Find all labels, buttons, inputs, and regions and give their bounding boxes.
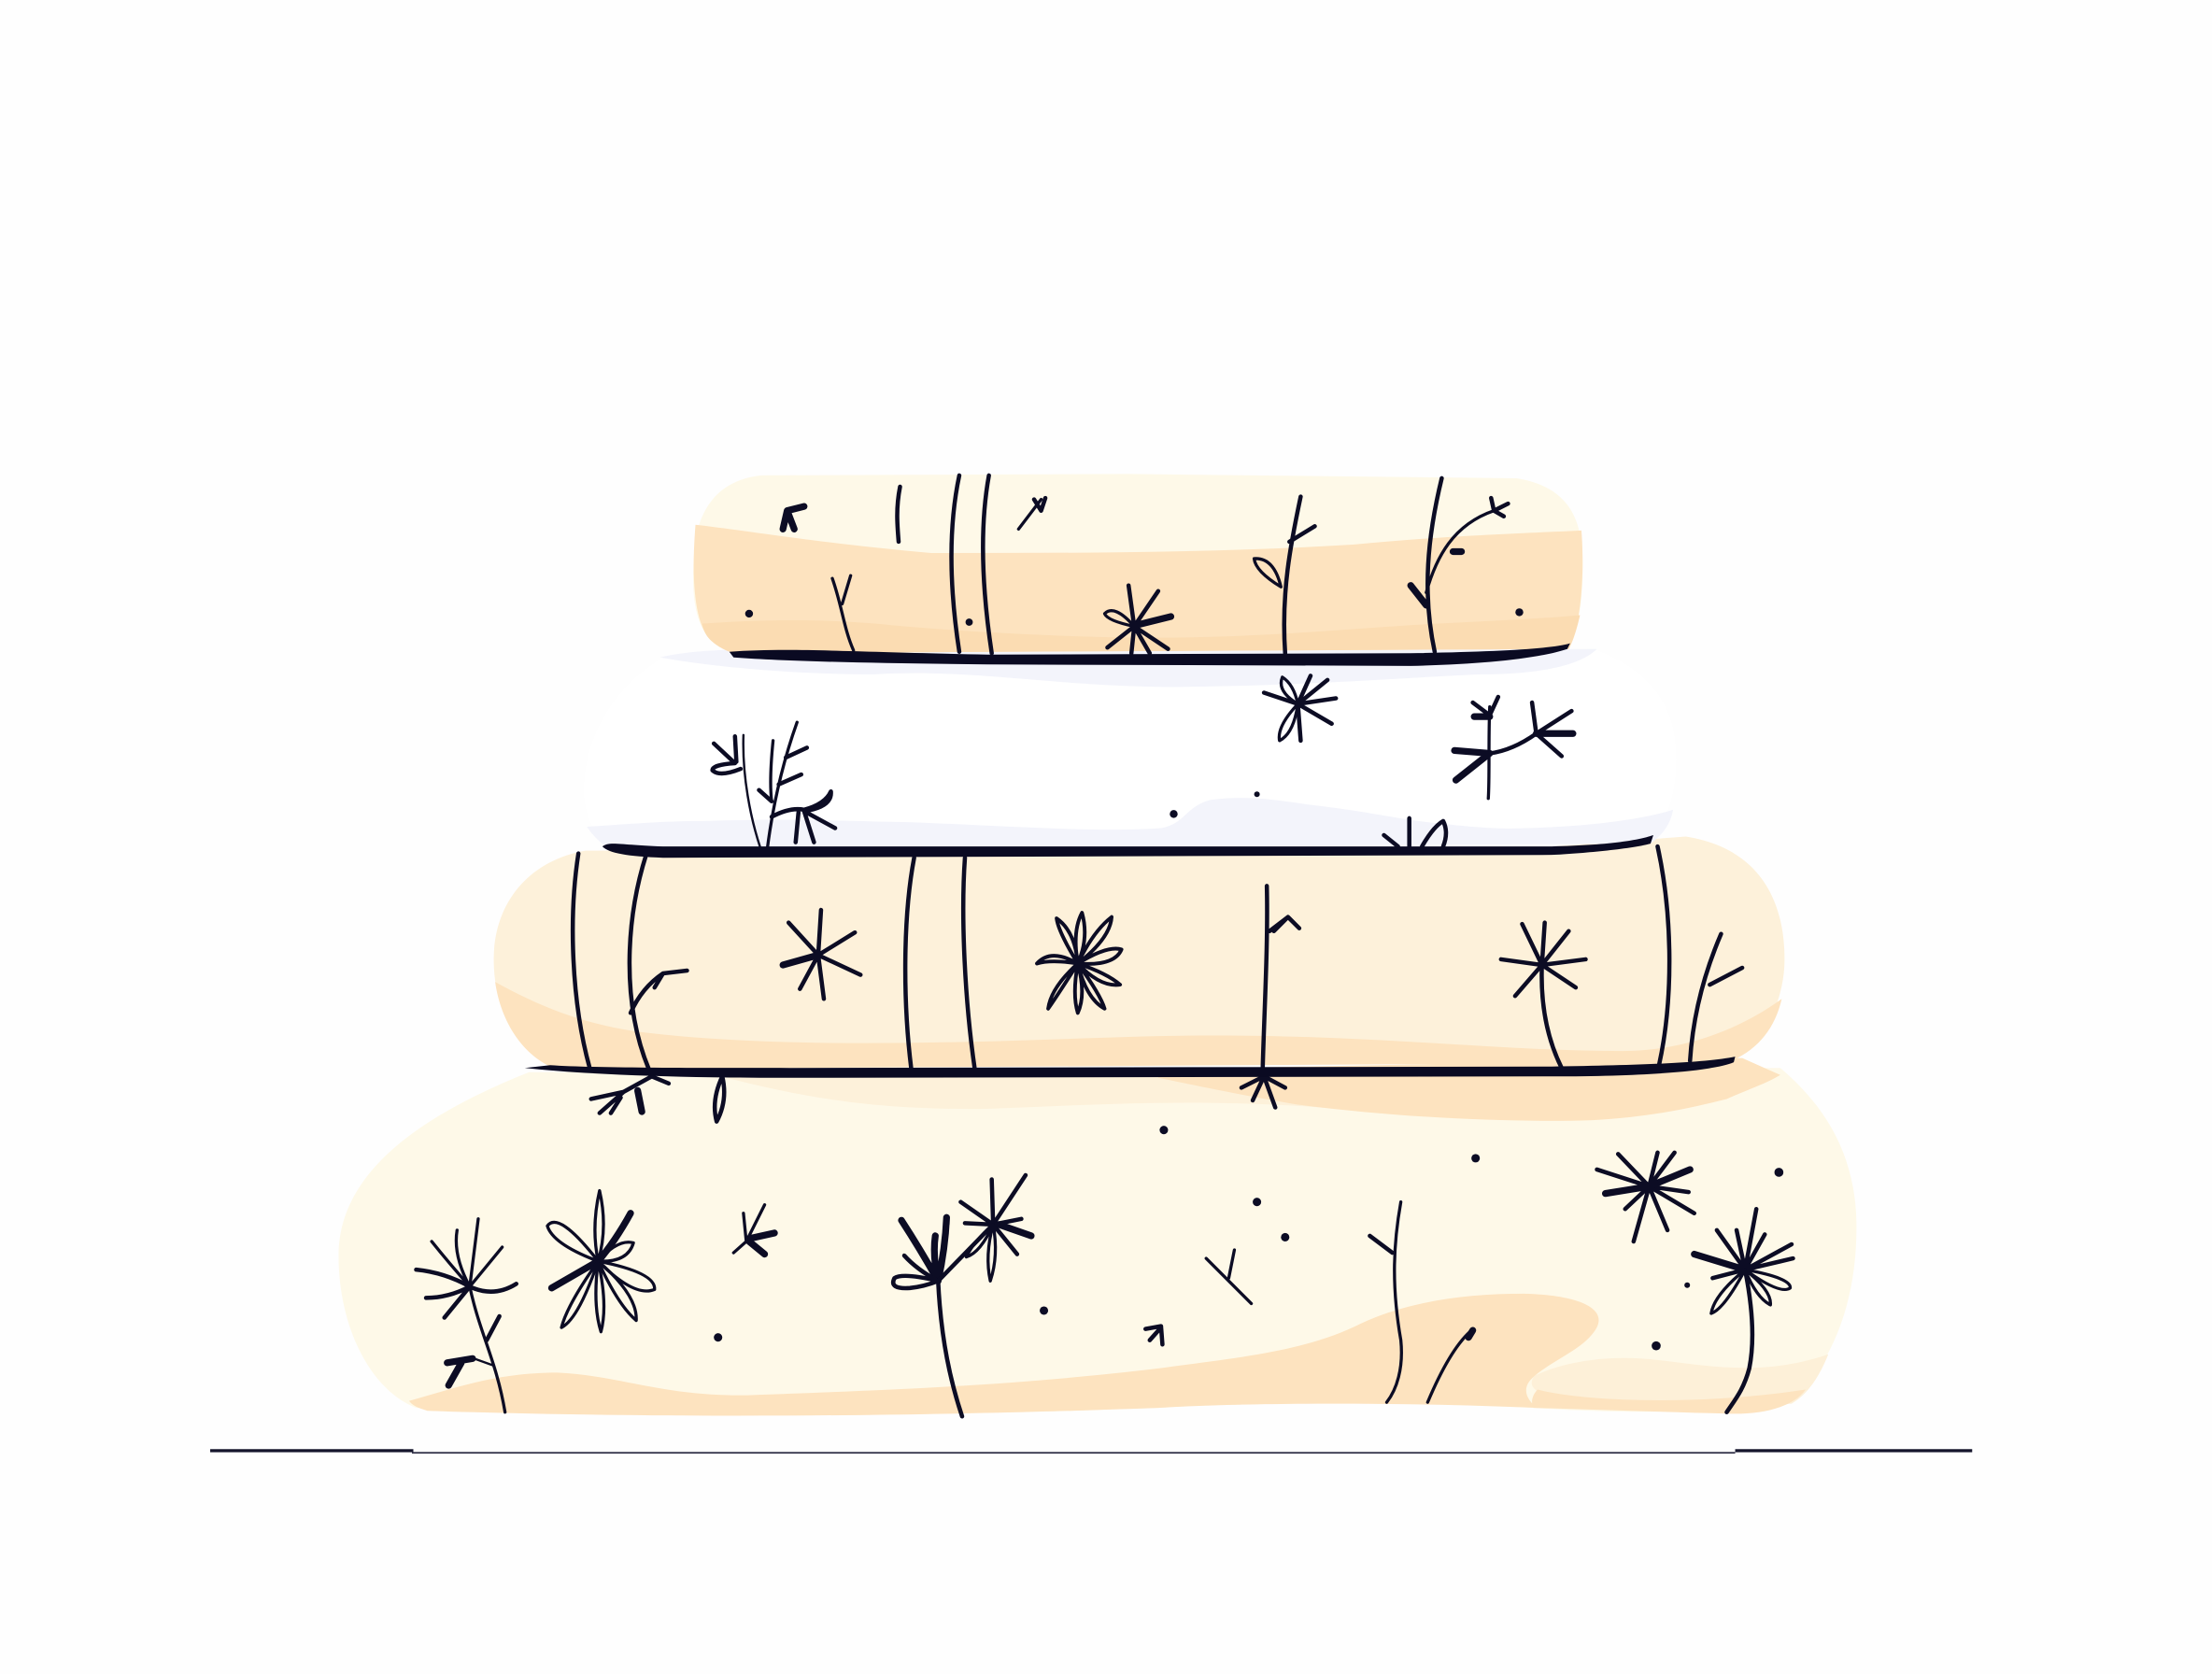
flower with stem: right <box>1501 923 1585 1068</box>
y sprig <box>1206 1250 1252 1303</box>
book 4 upper light stain <box>727 1070 1552 1114</box>
book 2: white book <box>584 649 1677 849</box>
small arrow <box>1145 1326 1162 1344</box>
floor line <box>210 1449 1972 1454</box>
book 1 bottom darker wave <box>702 615 1580 653</box>
flower: top centre <box>1264 675 1336 741</box>
flower: bottom centre <box>1104 586 1170 653</box>
book 2 top shadow <box>660 649 1597 687</box>
small sprig <box>733 1205 774 1255</box>
under-line leaf loop <box>715 1076 724 1122</box>
flower with stem: right <box>1694 1209 1793 1412</box>
book 1 flora <box>745 475 1524 653</box>
left sprig group <box>713 722 835 848</box>
thin y sprig <box>832 575 854 650</box>
flower: right upper <box>1597 1153 1694 1241</box>
sprig: right edge <box>1690 934 1742 1061</box>
flower: looped petals <box>547 1191 655 1332</box>
sprig on left spine <box>631 971 687 1013</box>
book 1: top small book <box>693 474 1582 653</box>
arrow mark <box>783 506 804 529</box>
book 4 dots <box>714 1126 1783 1351</box>
flower with stem: far left <box>417 1219 517 1412</box>
under-line arrow sprig <box>1241 1076 1285 1108</box>
book 4 flora <box>417 1076 1793 1416</box>
short line <box>897 487 900 542</box>
flower with stem and side flower <box>893 1175 1031 1416</box>
book 3 bottom cover line <box>525 1057 1736 1078</box>
book 4: bottom large cream book <box>338 1058 1856 1416</box>
book 2 dots <box>1170 791 1260 818</box>
under-line sprig left <box>591 1076 669 1114</box>
book 4 bottom peach wave <box>409 1294 1598 1415</box>
tall stem <box>1369 1202 1401 1402</box>
stem with curling branch <box>1411 478 1508 652</box>
stem with leaves <box>1255 497 1315 653</box>
book 1 dots <box>745 608 1524 626</box>
book 3 flora <box>573 846 1742 1072</box>
flower: looped <box>1037 913 1122 1013</box>
book 2 bottom cover line <box>603 835 1653 858</box>
tall spine lines <box>951 475 992 653</box>
spine lines <box>573 846 1669 1070</box>
book 3: peach-cream book <box>494 837 1784 1072</box>
right sprig group <box>1454 697 1573 799</box>
reed <box>1427 1330 1473 1402</box>
small sprig <box>1018 498 1045 529</box>
book 1 peach band <box>694 525 1582 653</box>
book 4 bottom right thin peach edge <box>1532 1390 1806 1413</box>
book 4 bottom right pale wave <box>1532 1355 1828 1406</box>
book 3 bottom peach band <box>495 982 1781 1070</box>
book 1 bottom cover line <box>730 644 1570 666</box>
book 2 bottom shadow <box>587 798 1673 849</box>
center stem with branch <box>1263 886 1299 1072</box>
bottom sprig group <box>1384 818 1446 846</box>
flower: eight ray <box>783 910 860 999</box>
book 2 flora <box>713 675 1573 848</box>
book 4 upper peach stain <box>1158 1058 1780 1121</box>
